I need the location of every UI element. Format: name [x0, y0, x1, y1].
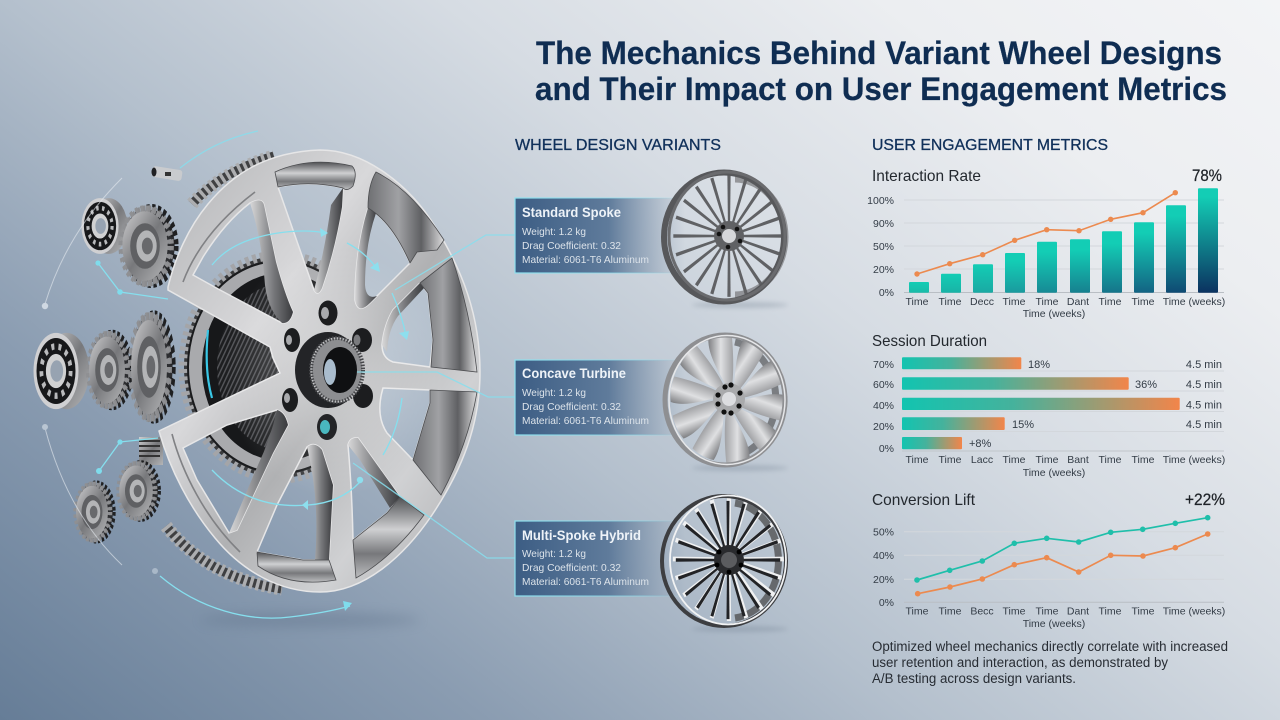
rim recesses — [257, 162, 477, 582]
x axis labels: Time (weeks) — [1163, 606, 1225, 618]
heading: user engagement metrics: USER ENGAGEMENT METRICS — [872, 137, 1108, 154]
connector: standard spoke — [395, 235, 515, 290]
outer rim lines — [172, 192, 255, 552]
panel: standard spoke: Drag Coefficient: 0.32 — [522, 240, 621, 252]
y axis and grid: 50% — [873, 241, 894, 253]
x axis labels: Time — [1099, 606, 1122, 618]
exploded parts: upper bearing — [81, 198, 127, 254]
x axis labels: Time — [906, 296, 929, 308]
exploded parts: middle bearing — [34, 333, 89, 409]
x axis labels: Time — [939, 606, 962, 618]
wheel: standard spoke — [664, 172, 788, 308]
hub bolts — [282, 300, 373, 440]
bar values: 36% — [1135, 379, 1157, 391]
x axis labels — [906, 606, 1225, 630]
y axis and grid: 0% — [879, 597, 894, 609]
x axis labels: Time — [1132, 606, 1155, 618]
y axis labels: 0% — [879, 443, 894, 455]
bar values — [969, 359, 1157, 450]
panel: standard spoke: Material: 6061-T6 Aluminum — [522, 254, 649, 266]
panel: standard spoke: Weight: 1.2 kg — [522, 226, 586, 238]
x axis labels: Time — [1036, 606, 1059, 618]
big wheel shadow — [200, 613, 420, 627]
bar values: 15% — [1012, 419, 1034, 431]
title — [535, 35, 1227, 107]
orange trend line — [914, 190, 1178, 277]
drum and internal gear behind the wheel — [183, 255, 377, 479]
chart title: conversion lift: Conversion Lift — [872, 492, 976, 509]
big wheel face — [159, 150, 480, 592]
conclusion text: Optimized wheel mechanics directly correlate with increased — [872, 639, 1228, 655]
x axis labels: Time — [1036, 296, 1059, 308]
x axis labels: Time — [1003, 454, 1026, 466]
panel: concave turbine — [515, 360, 685, 435]
x axis labels: Time (weeks) — [1163, 454, 1225, 466]
panel: concave turbine: Material: 6061-T6 Aluminum — [522, 415, 649, 427]
x axis labels: Time — [939, 296, 962, 308]
duration values: 4.5 min — [1186, 379, 1222, 391]
x axis labels: Time (weeks) — [1023, 308, 1085, 320]
panel: standard spoke — [515, 198, 685, 273]
x axis labels: Time — [906, 454, 929, 466]
chart: conversion lift — [872, 491, 1225, 630]
panel: multi-spoke hybrid: Material: 6061-T6 Aluminum — [522, 576, 649, 588]
heading: wheel design variants: WHEEL DESIGN VARIANTS — [515, 137, 721, 154]
central hub — [295, 332, 363, 408]
bars — [909, 188, 1218, 293]
x axis labels: Time (weeks) — [1023, 618, 1085, 630]
exploded parts: middle gear — [130, 317, 173, 417]
title: The Mechanics Behind Variant Wheel Designs — [536, 35, 1222, 71]
y axis and grid: 100% — [867, 195, 894, 207]
duration values: 4.5 min — [1186, 400, 1222, 412]
y axis and grid: 20% — [873, 574, 894, 586]
callout: 78%: 78% — [1192, 167, 1222, 185]
conclusion text — [872, 639, 1228, 687]
exploded parts: upper gear — [121, 209, 175, 283]
wheel: multi-spoke hybrid — [662, 496, 788, 632]
y axis and grid: 0% — [879, 287, 894, 299]
wheel hub highlight — [225, 247, 445, 497]
exploded parts: pin — [151, 166, 183, 181]
motion guides behind the wheel — [42, 131, 352, 618]
x axis labels: Time — [939, 454, 962, 466]
chart title: session duration: Session Duration — [872, 333, 987, 350]
panel: multi-spoke hybrid: Weight: 1.2 kg — [522, 548, 586, 560]
callout: +22%: +22% — [1185, 491, 1225, 509]
panel: concave turbine: Weight: 1.2 kg — [522, 387, 586, 399]
x axis labels: Time — [1036, 454, 1059, 466]
x axis labels: Time — [1099, 454, 1122, 466]
x axis labels: Bant — [1067, 454, 1089, 466]
exploded parts: middle gear bearing — [88, 334, 131, 406]
exploded parts: lower gear — [118, 464, 159, 518]
x axis labels: Time — [1099, 296, 1122, 308]
panel: concave turbine: Concave Turbine — [522, 365, 626, 381]
panel: concave turbine: Drag Coefficient: 0.32 — [522, 401, 621, 413]
y axis labels: 70% — [873, 359, 894, 371]
chart: interaction rate — [867, 167, 1225, 320]
conclusion text: A/B testing across design variants. — [872, 671, 1076, 687]
rim gear teeth — [166, 156, 282, 589]
exploded parts: lower gear bearing — [75, 484, 113, 540]
x axis labels: Lacc — [971, 454, 993, 466]
x axis labels: Time — [1132, 296, 1155, 308]
x axis labels: Becc — [970, 606, 994, 618]
x axis labels: Time — [1003, 606, 1026, 618]
bar values: +8% — [969, 438, 992, 450]
x axis labels: Time (weeks) — [1163, 296, 1225, 308]
chart title: interaction rate: Interaction Rate — [872, 168, 981, 185]
chart: session duration — [872, 333, 1225, 479]
connector: multi-spoke hybrid — [353, 463, 515, 558]
orange line — [915, 531, 1210, 596]
x axis labels — [906, 454, 1225, 479]
wheel: concave turbine — [665, 334, 791, 471]
y axis and grid — [867, 195, 1224, 299]
title: and Their Impact on User Engagement Metrics — [535, 71, 1227, 107]
bar values: 18% — [1028, 359, 1050, 371]
y axis labels: 60% — [873, 379, 894, 391]
y axis and grid — [873, 526, 1224, 609]
y axis labels: 40% — [873, 400, 894, 412]
connector: concave turbine — [357, 372, 515, 397]
row guide lines — [902, 371, 1224, 451]
flow arrows over the wheel — [212, 228, 409, 510]
duration values: 4.5 min — [1186, 419, 1222, 431]
y axis and grid: 50% — [873, 526, 894, 538]
x axis labels: Time — [1003, 296, 1026, 308]
duration values — [1186, 359, 1222, 431]
x axis labels: Time (weeks) — [1023, 467, 1085, 479]
x axis labels: Dant — [1067, 606, 1089, 618]
y axis labels — [873, 359, 894, 455]
panel: multi-spoke hybrid: Drag Coefficient: 0.32 — [522, 562, 621, 574]
x axis labels: Time — [1132, 454, 1155, 466]
x axis labels: Time — [906, 606, 929, 618]
panel: standard spoke: Standard Spoke — [522, 204, 621, 220]
x axis labels: Decc — [970, 296, 994, 308]
y axis and grid: 20% — [873, 264, 894, 276]
y axis labels: 20% — [873, 421, 894, 433]
panel: multi-spoke hybrid: Multi-Spoke Hybrid — [522, 527, 641, 543]
spoke side walls — [229, 188, 424, 560]
x axis labels: Dant — [1067, 296, 1089, 308]
conclusion text: user retention and interaction, as demonstrated by — [872, 655, 1169, 671]
panel: multi-spoke hybrid — [515, 521, 685, 596]
horizontal bars — [902, 357, 1180, 449]
duration values: 4.5 min — [1186, 359, 1222, 371]
y axis and grid: 90% — [873, 218, 894, 230]
exploded parts: lower gear stub — [139, 437, 163, 465]
y axis and grid: 40% — [873, 550, 894, 562]
x axis labels — [906, 296, 1225, 320]
teal line — [914, 515, 1210, 583]
